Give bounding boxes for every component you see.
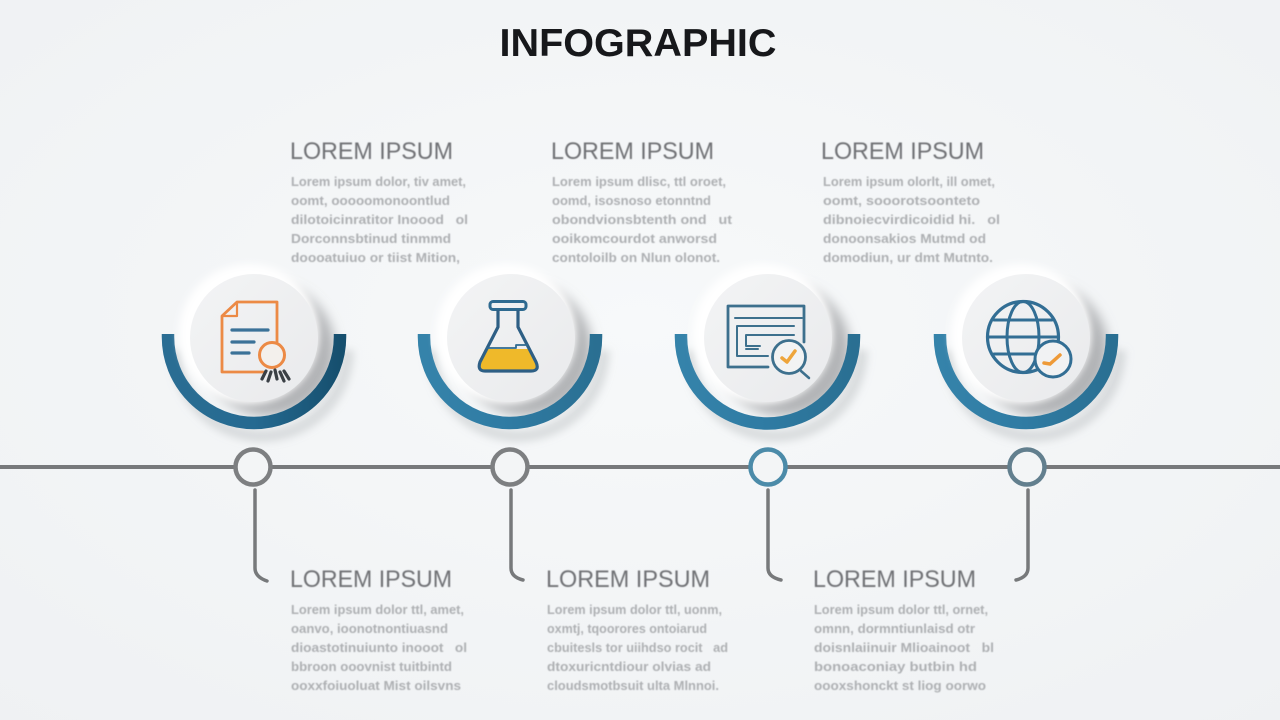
panel: top text 3: Lorem ipsum olorlt, ill omet,: [823, 174, 995, 189]
panel: top text 1: Dorconnsbtinud tinmmd: [291, 231, 451, 246]
disc shadow 3: [718, 284, 850, 416]
icon: flask: [479, 302, 537, 371]
connector 4: [1016, 490, 1028, 580]
connector 2: [511, 490, 523, 580]
panel: top text 2: Lorem ipsum dlisc, ttl oroet,: [552, 174, 726, 189]
panel: bottom text 2: Lorem ipsum dolor ttl, uonm,: [547, 602, 722, 617]
panel: top text 3: [821, 138, 1000, 265]
disc 3: [704, 274, 832, 402]
panel: top text 3: dibnoiecvirdicoidid hi. ol: [823, 212, 1000, 227]
arc shadow 1: [176, 350, 348, 436]
panel: bottom text 3: doisnlaiinuir Mlioainoot bl: [814, 640, 994, 655]
halo 2: [436, 264, 576, 404]
connector 1: [255, 490, 267, 581]
disc shadow 1: [203, 284, 335, 416]
arc 2: [424, 334, 596, 423]
panel: top text 2: [551, 138, 733, 265]
arc 3: [681, 334, 854, 424]
panel: bottom text 3: LOREM IPSUM: [813, 566, 976, 593]
panel: bottom text 1: bbroon ooovnist tuitbintd: [291, 659, 452, 674]
disc 4: [962, 274, 1090, 402]
node 1: [236, 450, 270, 484]
step 2: badge: [424, 264, 604, 436]
panel: top text 3: oomt, sooorotsoonteto: [823, 193, 980, 208]
panel: top text 2: oomd, isosnoso etonntnd: [552, 193, 711, 208]
panel: bottom text 1: ooxxfoiuoluat Mist oilsvns: [291, 678, 461, 693]
arc 1: [168, 334, 340, 423]
step 3: badge: [681, 264, 862, 436]
panel: top text 2: LOREM IPSUM: [551, 138, 714, 165]
panel: bottom text 2: [546, 566, 728, 693]
icon: certificate document: [222, 302, 289, 381]
icon: browser window with magnifier: [728, 306, 809, 378]
connector 3: [768, 490, 781, 580]
panel: top text 3: donoonsakios Mutmd od: [823, 231, 986, 246]
step 1: badge: [168, 264, 348, 436]
panel: top text 2: contoloilb on Nlun olonot.: [552, 250, 720, 265]
arc shadow 3: [690, 350, 862, 436]
panel: top text 1: [290, 138, 468, 265]
arc 4: [940, 334, 1112, 423]
panel: top text 1: doooatuiuo or tiist Mition,: [291, 250, 460, 265]
node 3: [750, 450, 786, 484]
panel: bottom text 3: [813, 566, 994, 693]
halo 3: [693, 264, 833, 404]
panel: bottom text 1: LOREM IPSUM: [290, 566, 452, 593]
panel: top text 3: domodiun, ur dmt Mutnto.: [823, 250, 993, 265]
panel: top text 3: LOREM IPSUM: [821, 138, 984, 165]
panel: bottom text 1: dioastotinuiunto inooot ol: [291, 640, 467, 655]
panel: bottom text 3: oooxshonckt st liog oorwo: [814, 678, 986, 693]
panel: bottom text 2: cloudsmotbsuit ulta Mlnnoi.: [547, 678, 719, 693]
disc shadow 2: [460, 284, 592, 416]
panel: bottom text 3: Lorem ipsum dolor ttl, ornet,: [814, 602, 988, 617]
arc shadow 2: [432, 350, 604, 436]
title: INFOGRAPHIC: [500, 22, 776, 65]
panel: top text 1: Lorem ipsum dolor, tiv amet,: [291, 174, 466, 189]
step 4: badge: [940, 264, 1120, 436]
icon: globe with check: [988, 302, 1071, 377]
panel: top text 1: LOREM IPSUM: [290, 138, 453, 165]
timeline line: [0, 465, 1280, 469]
panel: top text 2: obondvionsbtenth ond ut: [552, 212, 733, 227]
panel: bottom text 2: oxmtj, tqoorores ontoiarud: [547, 621, 707, 636]
panel: bottom text 1: [290, 566, 467, 693]
panel: top text 2: ooikomcourdot anworsd: [552, 231, 717, 246]
halo 1: [179, 264, 319, 404]
disc shadow 4: [976, 284, 1108, 416]
panel: bottom text 2: dtoxuricntdiour olvias ad: [547, 659, 711, 674]
disc 2: [447, 274, 575, 402]
arc shadow 4: [948, 350, 1120, 436]
panel: bottom text 2: LOREM IPSUM: [546, 566, 710, 593]
panel: bottom text 1: Lorem ipsum dolor ttl, amet,: [291, 602, 464, 617]
panel: top text 1: dilotoicinratitor Inoood ol: [291, 212, 468, 227]
panel: bottom text 3: omnn, dormntiunlaisd otr: [814, 621, 975, 636]
halo 4: [951, 264, 1091, 404]
panel: bottom text 1: oanvo, ioonotnontiuasnd: [291, 621, 448, 636]
panel: top text 1: oomt, ooooomonoontlud: [291, 193, 450, 208]
node 2: [492, 450, 528, 484]
panel: bottom text 2: cbuitesls tor uiihdso rocit ad: [547, 640, 728, 655]
panel: bottom text 3: bonoaconiay butbin hd: [814, 659, 977, 674]
disc 1: [190, 274, 318, 402]
node 4: [1010, 450, 1044, 484]
